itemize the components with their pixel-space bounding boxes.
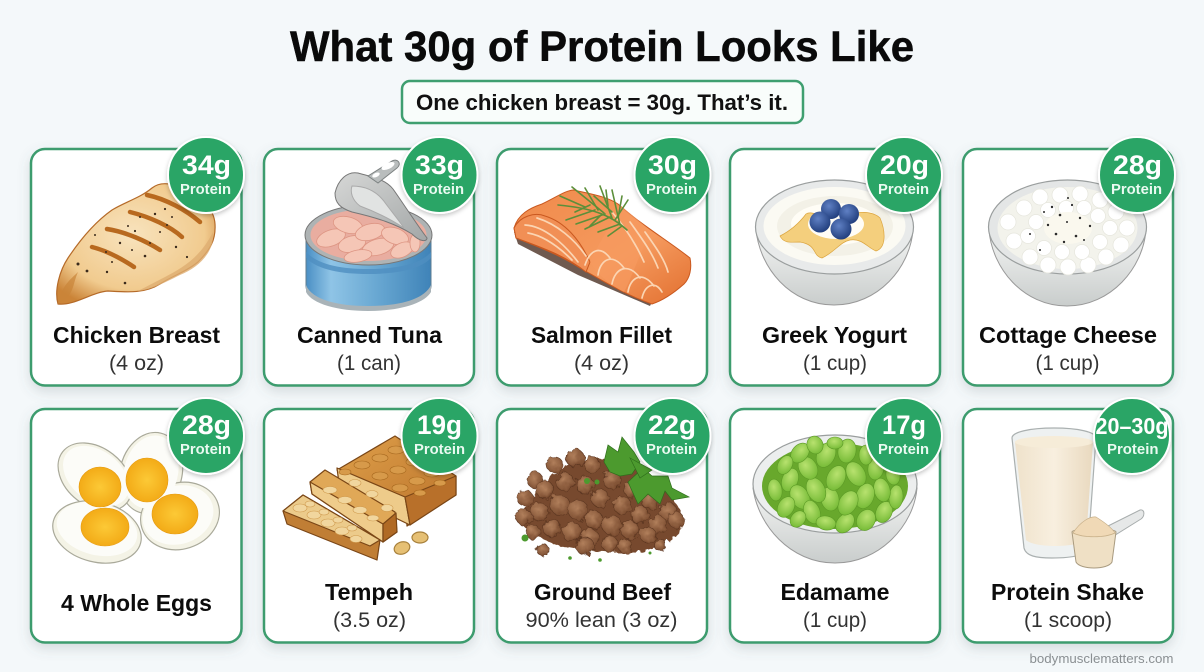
protein badge: Protein bbox=[180, 182, 231, 198]
protein badge: Protein bbox=[413, 182, 464, 198]
serving size: (4 oz) bbox=[109, 352, 164, 375]
icon: salmon fillet with dill bbox=[514, 186, 691, 306]
serving size: (1 cup) bbox=[803, 609, 867, 632]
serving size: (4 oz) bbox=[574, 352, 629, 375]
callout: chicken breast equals 30g: One chicken breast = 30g. That’s it. bbox=[416, 90, 788, 115]
protein badge: 28g bbox=[1113, 150, 1162, 180]
callout: chicken breast equals 30g bbox=[402, 81, 803, 123]
food name: Cottage Cheese bbox=[979, 322, 1157, 348]
icon: yogurt bowl with blueberries bbox=[756, 180, 914, 305]
protein badge: 20–30g bbox=[1096, 413, 1168, 439]
title: What 30g of Protein Looks Like bbox=[290, 23, 914, 71]
icon: edamame bowl bbox=[753, 434, 917, 563]
panel: ground beef bbox=[497, 398, 710, 642]
icon: grilled chicken breast bbox=[57, 184, 215, 304]
protein badge: 22g bbox=[648, 410, 696, 440]
serving size: 90% lean (3 oz) bbox=[526, 609, 678, 632]
icon: cottage cheese bowl bbox=[988, 180, 1146, 306]
protein badge: Protein bbox=[878, 442, 929, 458]
panel: canned tuna bbox=[264, 137, 478, 386]
food name: Protein Shake bbox=[991, 579, 1144, 605]
protein badge bbox=[1099, 137, 1175, 213]
food name: Edamame bbox=[780, 579, 890, 605]
icon: protein shake glass and scoop bbox=[1012, 428, 1144, 568]
protein badge: Protein bbox=[878, 182, 929, 198]
food name: Tempeh bbox=[325, 579, 413, 605]
protein badge bbox=[1094, 398, 1170, 474]
protein badge: Protein bbox=[180, 442, 231, 458]
panel: tempeh bbox=[264, 398, 478, 642]
source credit: bodymusclematters.com bbox=[1030, 652, 1174, 666]
panel: edamame bbox=[730, 398, 942, 642]
food name: Chicken Breast bbox=[53, 322, 220, 348]
protein badge: Protein bbox=[1107, 442, 1158, 458]
food name: Salmon Fillet bbox=[531, 322, 672, 348]
icon: sliced tempeh block bbox=[283, 436, 456, 560]
icon: ground beef with parsley bbox=[516, 437, 689, 562]
protein badge: Protein bbox=[1111, 182, 1162, 198]
serving size: (3.5 oz) bbox=[333, 609, 406, 632]
food name: Canned Tuna bbox=[297, 322, 442, 348]
protein badge: Protein bbox=[414, 442, 465, 458]
protein badge: 20g bbox=[880, 150, 929, 180]
protein badge: Protein bbox=[646, 182, 697, 198]
protein badge bbox=[634, 398, 710, 474]
serving size: (1 can) bbox=[337, 352, 401, 375]
protein badge: 30g bbox=[648, 150, 697, 180]
protein badge bbox=[402, 398, 478, 474]
protein badge: Protein bbox=[646, 442, 697, 458]
protein badge: 19g bbox=[417, 410, 462, 440]
panel: protein shake bbox=[963, 398, 1173, 642]
protein badge bbox=[402, 137, 478, 213]
protein badge bbox=[168, 137, 244, 213]
serving size: (1 cup) bbox=[1036, 352, 1100, 375]
food name: 4 Whole Eggs bbox=[61, 590, 212, 616]
protein badge bbox=[866, 398, 942, 474]
protein badge bbox=[168, 398, 244, 474]
protein badge: 33g bbox=[415, 150, 464, 180]
serving size: (1 cup) bbox=[803, 352, 867, 375]
icon: four halved boiled eggs bbox=[45, 426, 228, 572]
protein badge: 34g bbox=[182, 150, 231, 180]
protein badge: 17g bbox=[882, 410, 926, 440]
protein badge bbox=[634, 137, 710, 213]
food name: Ground Beef bbox=[534, 579, 671, 605]
serving size: (1 scoop) bbox=[1024, 609, 1112, 632]
panel: chicken breast bbox=[31, 137, 244, 386]
panel: whole eggs bbox=[31, 398, 244, 642]
protein badge bbox=[866, 137, 942, 213]
panel: cottage cheese bbox=[963, 137, 1175, 386]
panel: salmon fillet bbox=[497, 137, 710, 386]
food name: Greek Yogurt bbox=[762, 322, 907, 348]
protein badge: 28g bbox=[182, 410, 231, 440]
panel: greek yogurt bbox=[730, 137, 942, 386]
icon: opened tuna can bbox=[305, 160, 432, 311]
